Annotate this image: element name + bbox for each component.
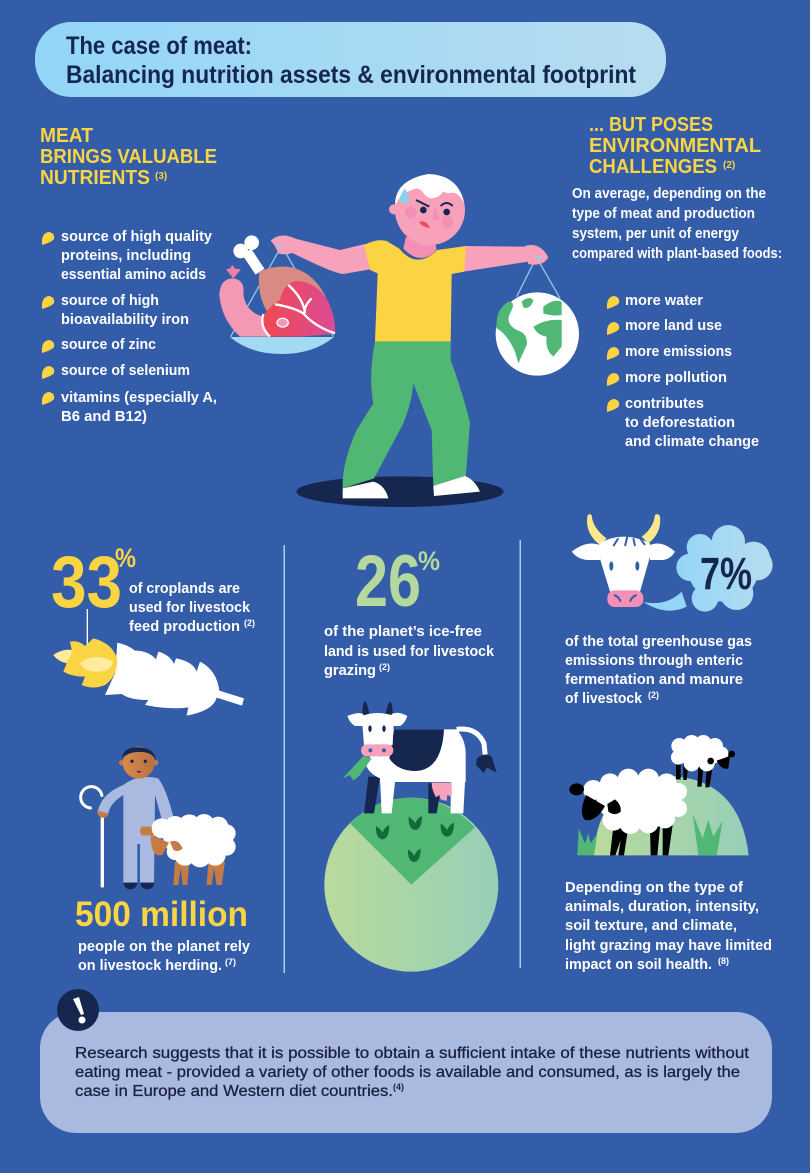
stat: 26 percent bbox=[324, 541, 495, 679]
text: environmental intro: compared with plant-based foods: bbox=[572, 246, 782, 262]
neck bbox=[403, 237, 437, 258]
list: nutrients: source of zinc bbox=[61, 337, 156, 353]
text: light grazing: light grazing may have limited bbox=[565, 938, 772, 954]
text: greenhouse gas: (2) bbox=[648, 690, 659, 700]
callout: research note: (4) bbox=[393, 1082, 404, 1092]
scale strings bbox=[231, 252, 560, 337]
illustration: cow on planet bbox=[324, 701, 498, 972]
list: nutrients: source of high quality bbox=[61, 229, 212, 245]
stat: 26 percent: grazing bbox=[324, 663, 376, 679]
stat: 26 percent: 26 bbox=[355, 541, 421, 622]
list: nutrients: vitamins (especially A, bbox=[61, 390, 217, 406]
callout: research note: eating meat - provided a variety of other foods is available and consumed, as is largely the bbox=[75, 1064, 740, 1081]
heading: but poses environmental challenges: CHALLENGES bbox=[589, 156, 717, 178]
stat: 26 percent: of the planet’s ice-free bbox=[324, 624, 482, 640]
text: greenhouse gas: fermentation and manure bbox=[565, 672, 743, 688]
sausage bbox=[219, 278, 268, 337]
heading: but poses environmental challenges bbox=[589, 114, 761, 178]
meat bone bbox=[247, 252, 260, 272]
head bbox=[395, 175, 465, 245]
icon: exclamation mark bbox=[57, 989, 99, 1031]
left arm bbox=[292, 238, 370, 274]
icon: shepherd with sheep bbox=[81, 747, 236, 889]
text: light grazing bbox=[565, 880, 772, 973]
list: environmental impacts bbox=[607, 293, 759, 450]
cow head bbox=[362, 713, 394, 745]
list: nutrients: proteins, including bbox=[61, 248, 191, 264]
callout: research note: Research suggests that it is possible to obtain a sufficient intake of these nutrients without bbox=[75, 1045, 750, 1062]
list: nutrients bbox=[42, 229, 217, 425]
right arm bbox=[463, 246, 528, 272]
list: environmental impacts: contributes bbox=[625, 396, 704, 412]
stat: 33 percent: (2) bbox=[244, 618, 255, 628]
text: environmental intro: system, per unit of energy bbox=[572, 226, 739, 242]
cow far legs bbox=[364, 777, 442, 813]
heading: but poses environmental challenges: ENVIRONMENTAL bbox=[589, 135, 761, 157]
stat: 500 million: (7) bbox=[225, 957, 236, 967]
stat divider left bbox=[284, 545, 285, 973]
shepherd body bbox=[98, 777, 173, 883]
stat: 33 percent: of croplands are bbox=[129, 581, 240, 597]
stat: 33 percent: feed production bbox=[129, 619, 240, 635]
text: greenhouse gas: emissions through enteric bbox=[565, 653, 743, 669]
shadow bbox=[296, 476, 504, 507]
text: greenhouse gas: of the total greenhouse gas bbox=[565, 634, 752, 650]
ham bbox=[259, 267, 329, 313]
callout: research note: case in Europe and Western diet countries. bbox=[75, 1083, 393, 1100]
text: environmental intro: On average, depending on the bbox=[572, 186, 766, 202]
label: 7 percent: 7% bbox=[700, 548, 752, 599]
stat: 500 million: people on the planet rely bbox=[78, 939, 250, 955]
globe bbox=[496, 292, 579, 376]
stat divider right bbox=[520, 540, 521, 968]
sweat drop bbox=[399, 188, 409, 203]
scale plate bbox=[230, 337, 334, 354]
heading: but poses environmental challenges: ... BUT POSES bbox=[589, 114, 713, 136]
stat: 26 percent: (2) bbox=[379, 662, 390, 672]
list: environmental impacts: more land use bbox=[625, 318, 722, 334]
heading: meat brings valuable nutrients: BRINGS VALUABLE bbox=[40, 146, 217, 168]
list: nutrients: bioavailability iron bbox=[61, 312, 189, 328]
text: light grazing: impact on soil health. bbox=[565, 957, 712, 973]
icon: cow head with emissions cloud bbox=[572, 514, 773, 612]
list: environmental impacts: more pollution bbox=[625, 370, 727, 386]
text: light grazing: soil texture, and climate, bbox=[565, 918, 737, 934]
text: environmental intro bbox=[572, 186, 782, 262]
list: nutrients: essential amino acids bbox=[61, 267, 206, 283]
text: light grazing: Depending on the type of bbox=[565, 880, 743, 896]
hair bbox=[395, 174, 464, 205]
stat: 26 percent: land is used for livestock bbox=[324, 644, 495, 660]
list: environmental impacts: and climate change bbox=[625, 434, 759, 450]
cow body bbox=[365, 729, 466, 813]
text: environmental intro: type of meat and production bbox=[572, 206, 755, 222]
stat: 33 percent: 33 bbox=[51, 542, 122, 623]
list: nutrients: B6 and B12) bbox=[61, 409, 147, 425]
sheep wool bbox=[152, 814, 236, 867]
sheep small legs bbox=[676, 763, 713, 787]
illustration: sheep on hill bbox=[569, 735, 749, 855]
heading: meat brings valuable nutrients: NUTRIENTS bbox=[40, 167, 150, 189]
list: environmental impacts: more emissions bbox=[625, 344, 732, 360]
sheep legs bbox=[173, 862, 225, 885]
title banner: The case of meat: bbox=[66, 32, 252, 60]
sheep large legs bbox=[610, 825, 673, 855]
list: nutrients: source of high bbox=[61, 293, 159, 309]
callout: research note bbox=[40, 1012, 772, 1133]
icon: wheat ear bbox=[53, 609, 244, 716]
trousers bbox=[343, 341, 470, 488]
shirt bbox=[364, 240, 466, 341]
list: environmental impacts: to deforestation bbox=[625, 415, 735, 431]
cane bbox=[101, 813, 104, 887]
text: light grazing: animals, duration, intensity, bbox=[565, 899, 759, 915]
stat: 500 million bbox=[75, 895, 250, 974]
cow horns bbox=[362, 701, 393, 717]
stat: 500 million: 500 million bbox=[75, 895, 248, 934]
stat: 500 million: on livestock herding. bbox=[78, 958, 222, 974]
heading: meat brings valuable nutrients: MEAT bbox=[40, 125, 93, 147]
stat: 26 percent: % bbox=[418, 546, 440, 576]
illustration: person balancing meat and planet bbox=[219, 174, 579, 507]
list: nutrients: source of selenium bbox=[61, 363, 190, 379]
heading: meat brings valuable nutrients bbox=[40, 125, 217, 189]
text: greenhouse gas: of livestock bbox=[565, 691, 643, 707]
heading: but poses environmental challenges: (2) bbox=[723, 160, 735, 171]
title banner bbox=[35, 22, 666, 97]
face bbox=[420, 207, 427, 213]
shoes bbox=[343, 482, 388, 498]
text: greenhouse gas bbox=[565, 634, 752, 707]
stat: 33 percent bbox=[51, 542, 255, 635]
stat: 33 percent: used for livestock bbox=[129, 600, 251, 616]
text: light grazing: (8) bbox=[718, 956, 729, 966]
heading: meat brings valuable nutrients: (3) bbox=[155, 171, 167, 182]
sheep face bbox=[151, 835, 169, 855]
title banner: Balancing nutrition assets & environmental footprint bbox=[66, 61, 637, 89]
list: environmental impacts: more water bbox=[625, 293, 703, 309]
stat: 33 percent: % bbox=[115, 543, 136, 573]
